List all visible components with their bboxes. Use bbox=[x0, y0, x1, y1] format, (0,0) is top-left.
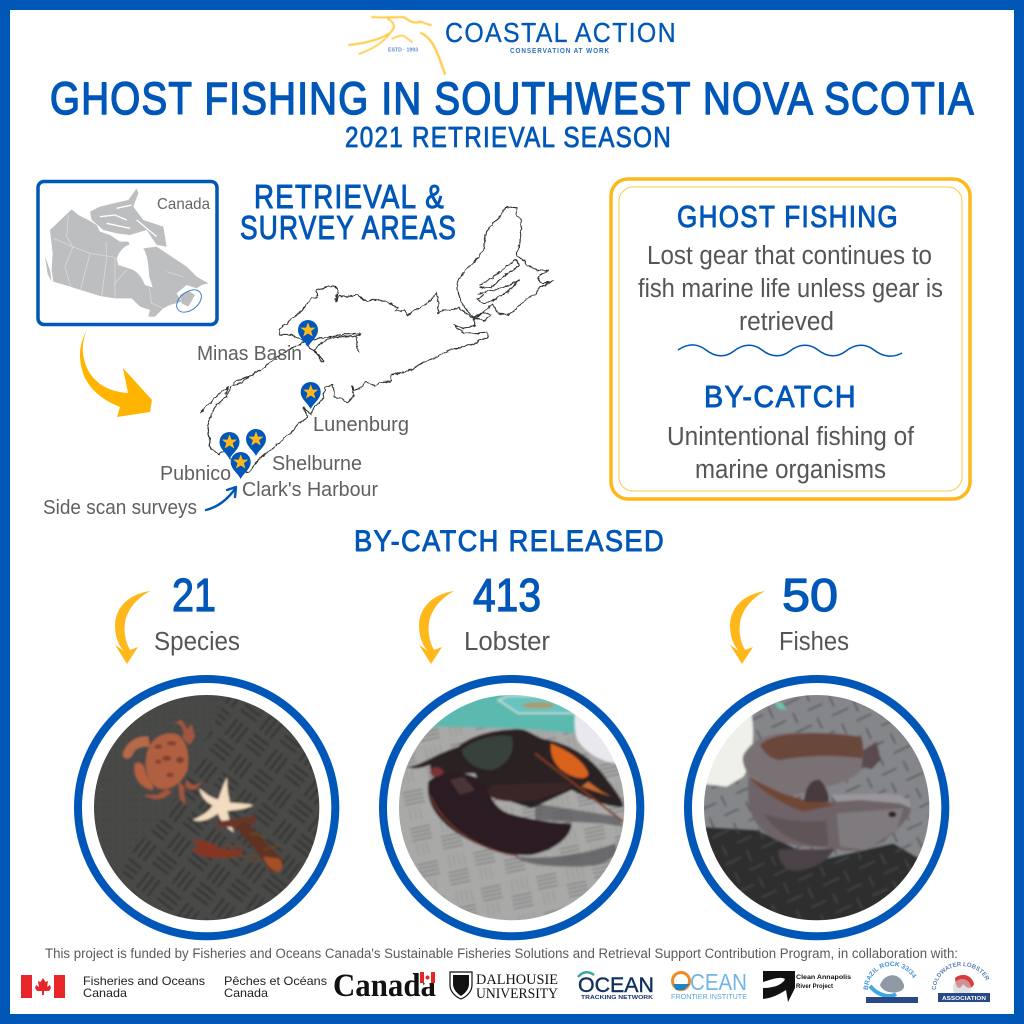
inset frame bbox=[38, 182, 217, 324]
Hudson Bay cut-out bbox=[100, 205, 157, 287]
stat: 413 lobster bbox=[419, 569, 551, 664]
panel: Canada inset map bbox=[38, 182, 217, 324]
province lines bbox=[53, 215, 183, 308]
heading: ghost fishing: GHOST FISHING bbox=[677, 199, 899, 234]
logo: Dalhousie University: DALHOUSIE bbox=[476, 972, 558, 988]
subtitle: 2021 RETRIEVAL SEASON bbox=[345, 122, 672, 154]
logo: Ocean Frontier Institute: FRONTIER INSTITUTE bbox=[671, 994, 747, 1001]
arrow bbox=[115, 591, 150, 664]
arrow: side scan surveys bbox=[206, 487, 236, 510]
label: Fishes bbox=[779, 628, 849, 656]
partner logos bbox=[21, 962, 990, 1004]
Bras d'Or Lake bbox=[477, 258, 518, 303]
logo: Coldwater Lobster Association: COLDWATER LOBSTER bbox=[932, 962, 990, 990]
heading: retrieval and survey areas bbox=[240, 178, 457, 246]
pin: Lunenburg bbox=[301, 382, 321, 409]
heading: retrieval and survey areas: RETRIEVAL & bbox=[254, 178, 445, 215]
ring bbox=[688, 679, 945, 936]
text: Fisheries and Oceans bbox=[83, 974, 205, 1000]
text: Fisheries and Oceans: Canada bbox=[83, 986, 127, 1000]
text: Peches et Oceans: Canada bbox=[224, 986, 268, 1000]
by-catch definition bbox=[667, 423, 915, 484]
heading: by-catch released: BY-CATCH RELEASED bbox=[354, 525, 665, 558]
logo: Clean Annapolis River Project bbox=[763, 971, 851, 1002]
logo: Ocean Tracking Network: TRACKING NETWORK bbox=[581, 995, 654, 1001]
map of Nova Scotia bbox=[199, 206, 553, 472]
logo: Brazil Rock 33/34 bbox=[864, 962, 918, 1003]
map labels: Lunenburg bbox=[313, 414, 409, 436]
inset label: Canada bbox=[157, 196, 210, 213]
map labels bbox=[43, 343, 409, 519]
text: Fisheries and Oceans: Fisheries and Oceans bbox=[83, 974, 205, 988]
arrow bbox=[419, 591, 454, 664]
photo: large lobster bbox=[383, 679, 640, 936]
logo: Brazil Rock 33/34: BRAZIL ROCK 33/34 bbox=[864, 962, 916, 990]
panel: definitions bbox=[611, 179, 970, 499]
ghost fishing definition bbox=[638, 242, 943, 336]
heading: by-catch: BY-CATCH bbox=[704, 379, 857, 414]
logo: Clean Annapolis River Project: Clean Annapolis bbox=[796, 974, 851, 981]
logo: Dalhousie University bbox=[450, 972, 558, 1002]
logo: Coldwater Lobster Association: ASSOCIATION bbox=[942, 996, 986, 1002]
logo: Coldwater Lobster Association bbox=[932, 962, 990, 1002]
logo: Ocean Frontier Institute: CEAN bbox=[690, 969, 747, 995]
Cape Breton outline bbox=[456, 206, 553, 321]
map labels: Pubnico bbox=[160, 463, 231, 485]
photo content bbox=[395, 690, 628, 923]
ghost fishing definition: fish marine life unless gear is bbox=[638, 275, 943, 303]
photo content bbox=[90, 690, 323, 923]
arrow: inset to main map bbox=[80, 330, 152, 417]
ring bbox=[78, 679, 335, 936]
map labels: Minas Basin bbox=[197, 343, 302, 365]
photo content bbox=[700, 690, 933, 923]
map labels: Shelburne bbox=[272, 453, 362, 475]
map labels: Clark's Harbour bbox=[242, 479, 378, 501]
map labels: Side scan surveys bbox=[43, 497, 197, 519]
arrow bbox=[730, 591, 765, 664]
funding statement: This project is funded by Fisheries and Oceans Canada's Sustainable Fisheries Solutions and Retrieval Support Contribution Program, in collaboration with: bbox=[45, 946, 958, 961]
map of Canada bbox=[45, 188, 208, 317]
stat: 50 fishes bbox=[730, 569, 849, 664]
icon: yellow bird bbox=[349, 17, 445, 74]
logo: Canadian flag bbox=[21, 975, 65, 998]
mainland outline bbox=[207, 285, 487, 472]
logo: Ocean Tracking Network: OCEAN bbox=[578, 974, 654, 997]
logo: Ocean Frontier Institute bbox=[671, 969, 747, 1001]
wave divider bbox=[678, 345, 902, 356]
pin: Shelburne bbox=[246, 429, 266, 456]
ghost fishing definition: retrieved bbox=[739, 308, 834, 336]
logo: Clean Annapolis River Project: River Project bbox=[796, 983, 834, 990]
by-catch definition: marine organisms bbox=[695, 456, 886, 484]
number: 50 bbox=[782, 569, 838, 621]
photo: crab, starfish and small lobster bbox=[78, 679, 335, 936]
text: Peches et Oceans bbox=[224, 974, 327, 1000]
pin: Minas Basin bbox=[298, 320, 318, 347]
label: Lobster bbox=[464, 628, 551, 656]
Digby Neck and Annapolis Basin bbox=[199, 374, 252, 413]
pin: Clark's Harbour bbox=[231, 452, 251, 479]
established date: ESTD · 1993 bbox=[388, 48, 418, 54]
number: 413 bbox=[473, 569, 541, 621]
logo wordmark: COASTAL ACTION bbox=[445, 17, 677, 48]
logo: Canada wordmark: Canada bbox=[333, 968, 436, 1004]
label: Species bbox=[154, 628, 240, 656]
ghost fishing definition: Lost gear that continues to bbox=[647, 242, 932, 270]
panel outer border bbox=[611, 179, 970, 499]
logo: Dalhousie University: UNIVERSITY bbox=[476, 986, 558, 1002]
ring bbox=[383, 679, 640, 936]
photo: wolffish bbox=[688, 679, 945, 936]
panel inner border bbox=[619, 187, 962, 491]
number: 21 bbox=[172, 569, 216, 621]
pin: Pubnico bbox=[220, 432, 240, 459]
logo: Coastal Action bbox=[349, 17, 677, 74]
heading: retrieval and survey areas: SURVEY AREAS bbox=[240, 209, 457, 246]
logo tagline: CONSERVATION AT WORK bbox=[510, 48, 610, 55]
stat: 21 species bbox=[115, 569, 240, 664]
by-catch definition: Unintentional fishing of bbox=[667, 423, 915, 451]
text: Peches et Oceans: Pêches et Océans bbox=[224, 974, 327, 988]
location pins bbox=[220, 320, 321, 479]
highlight ellipse around Nova Scotia bbox=[172, 285, 206, 317]
